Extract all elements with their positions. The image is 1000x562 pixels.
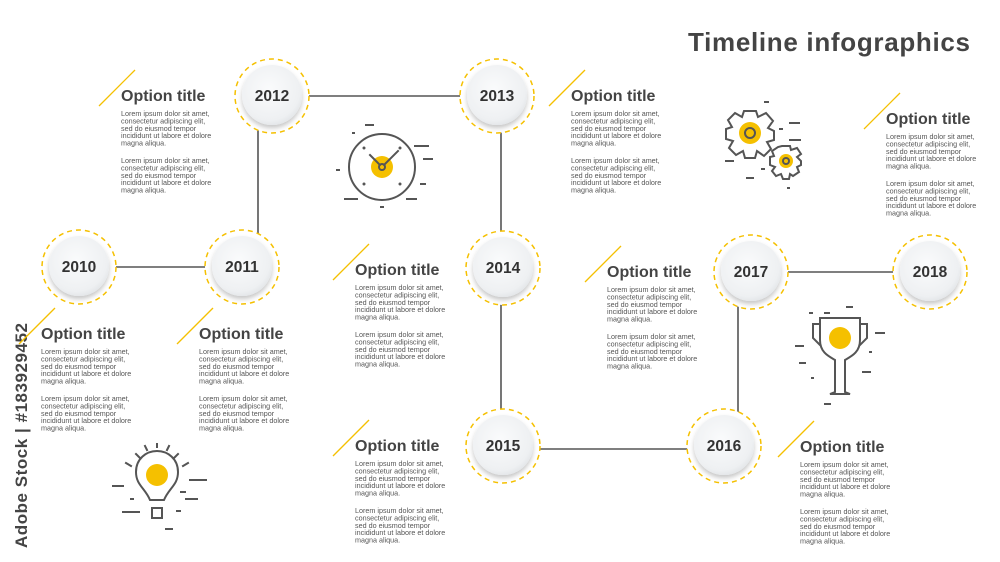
text block 2015: Option title: [355, 438, 440, 455]
text block 2013: [549, 70, 661, 195]
watermark: Adobe Stock | #183929452: [12, 323, 31, 548]
year nodes: 2011: [225, 259, 259, 276]
year nodes: 2016: [707, 438, 742, 455]
text block 2010: Option title: [41, 326, 126, 343]
text block 2011: [177, 308, 289, 433]
text block 2010: [19, 308, 131, 433]
text block 2015: [333, 420, 445, 545]
icon: trophy: [796, 307, 884, 404]
year nodes: 2015: [486, 438, 521, 455]
year nodes: 2010: [62, 259, 96, 276]
text block 2011: Option title: [199, 326, 284, 343]
icon: gears: [726, 102, 801, 188]
text block 2016: [778, 421, 890, 546]
text block 2018: Option title: [886, 111, 971, 128]
icon: light bulb: [113, 444, 206, 529]
year nodes: 2014: [486, 260, 521, 277]
text block 2018: [864, 93, 976, 218]
connector lines: [79, 96, 930, 449]
year nodes: [42, 59, 967, 483]
text block 2014: [333, 244, 445, 369]
year nodes: 2018: [913, 264, 948, 281]
year nodes: 2013: [480, 88, 515, 105]
year nodes: 2017: [734, 264, 768, 281]
text block 2016: Option title: [800, 439, 885, 456]
icon: clock: [337, 125, 432, 207]
text block 2014: Option title: [355, 262, 440, 279]
text block 2012: Option title: [121, 88, 206, 105]
title: Timeline infographics: [688, 27, 970, 57]
text block 2013: Option title: [571, 88, 656, 105]
year nodes: 2012: [255, 88, 289, 105]
text block 2017: Option title: [607, 264, 692, 281]
text block 2017: [585, 246, 697, 371]
text block 2012: [99, 70, 211, 195]
